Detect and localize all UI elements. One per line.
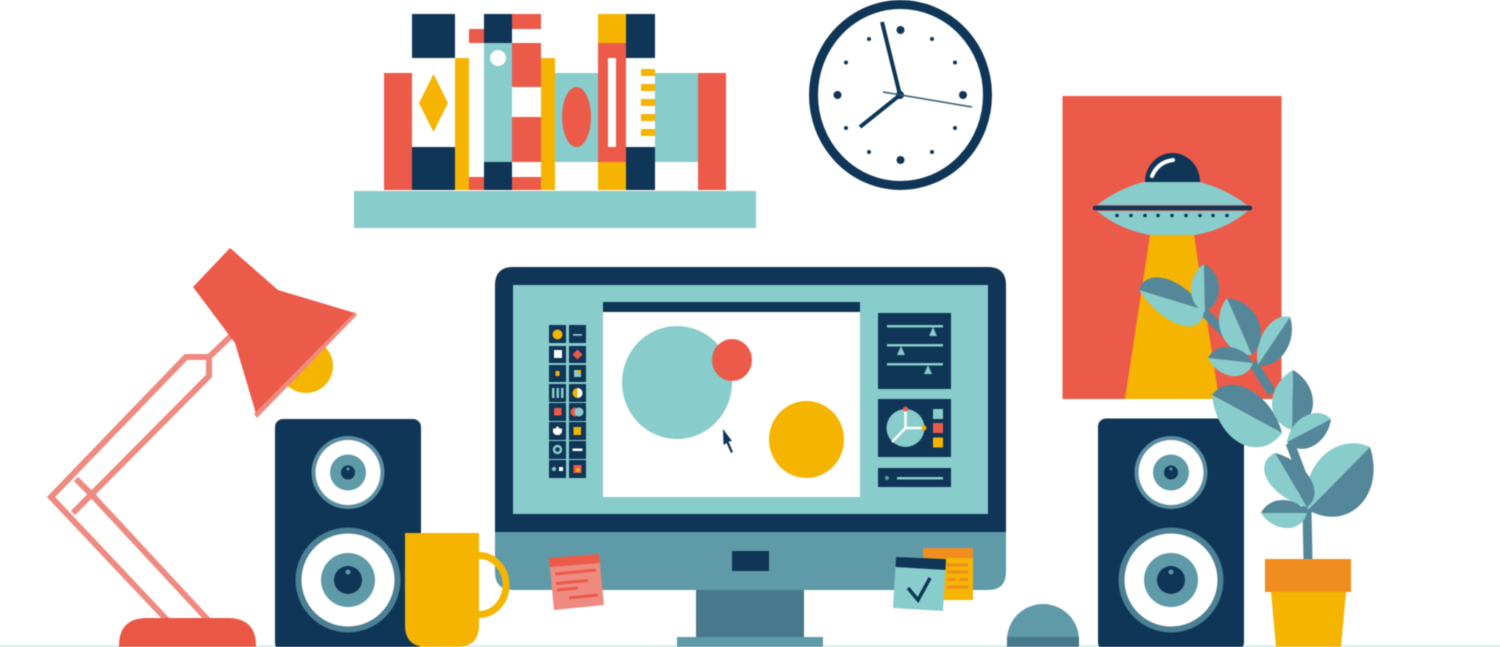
book: coral left (384, 73, 412, 190)
book: navy with stripes (626, 14, 655, 190)
leaf cluster bottom (1261, 443, 1374, 528)
speaker: left (275, 419, 421, 647)
monitor (495, 267, 1006, 647)
speaker: right (1098, 418, 1244, 647)
leaf cluster lower (1212, 370, 1331, 449)
book: teal with dot (484, 14, 512, 190)
icon: desk lamp (51, 248, 357, 647)
monitor stand (677, 589, 823, 647)
book: coral and yellow (598, 14, 626, 190)
canvas window (603, 302, 860, 497)
leaf cluster top (1139, 264, 1219, 326)
sticky note: coral (549, 554, 604, 610)
panel: bookshelf (354, 14, 756, 228)
sticky note: check mark (893, 557, 946, 611)
icon: yellow mug (405, 533, 506, 647)
book: teal with oval (555, 73, 598, 162)
book: coral right (698, 73, 726, 190)
lamp base (119, 618, 256, 647)
lamp shade (193, 248, 357, 418)
ground line (0, 645, 1500, 647)
book: white with coral caps (469, 29, 484, 190)
ufo saucer (1095, 182, 1250, 235)
lamp bulb (279, 339, 333, 393)
shelf (354, 191, 756, 228)
screen (513, 285, 988, 514)
sticky note: yellow (923, 548, 973, 600)
monitor chin (495, 531, 1006, 590)
book: coral striped (512, 14, 541, 190)
panel: pie chart widget (878, 399, 951, 457)
panel: tool palette (549, 325, 586, 478)
icon: wall clock (814, 4, 988, 186)
leaf cluster middle (1208, 298, 1292, 376)
lamp arm (51, 335, 232, 620)
book: navy with diamond (412, 14, 455, 190)
panel: slider controls (878, 313, 951, 389)
book: yellow slim (455, 58, 469, 190)
flower pot (1265, 559, 1351, 647)
camera slot (732, 551, 769, 571)
icon: cursor (723, 429, 733, 453)
book: teal wide (655, 73, 698, 162)
icon: potted plant (1139, 264, 1374, 647)
icon: mouse (1007, 604, 1079, 647)
panel: progress bar widget (878, 468, 951, 487)
monitor bezel (495, 267, 1006, 532)
plant stem (1204, 312, 1308, 560)
book: yellow slim second (541, 58, 555, 190)
ufo dome (1145, 153, 1200, 182)
panel: ufo poster (1062, 96, 1282, 399)
light beam (1125, 235, 1219, 399)
